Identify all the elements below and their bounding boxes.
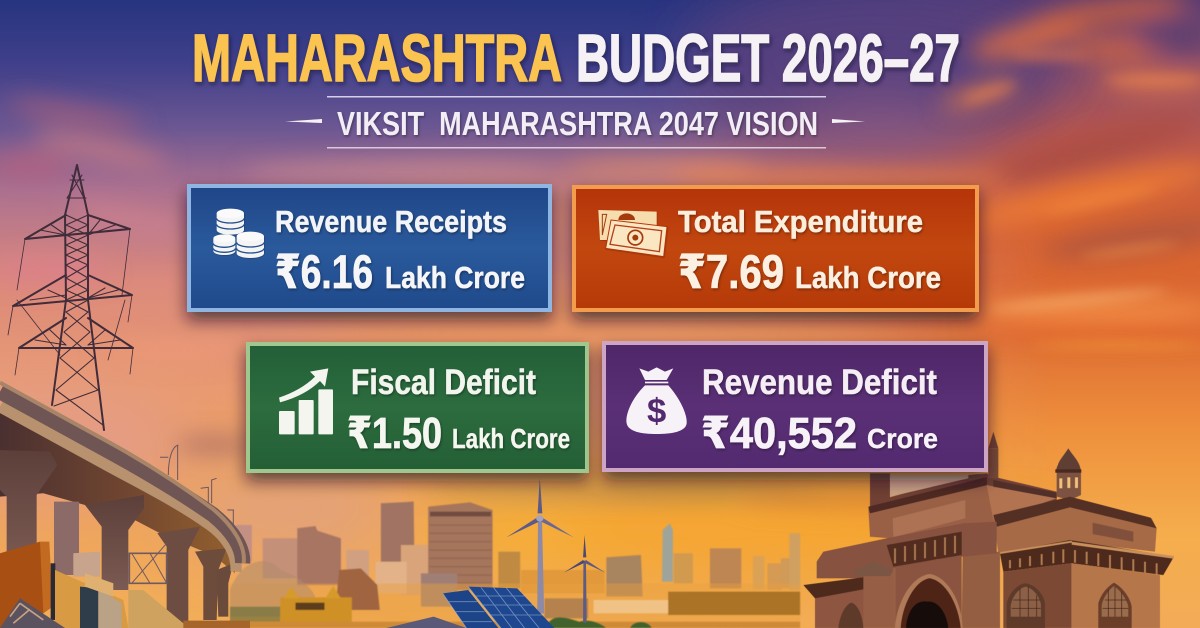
subtitle: Viksit Maharashtra 2047 Vision	[285, 96, 865, 148]
title: MAHARASHTRA	[192, 21, 562, 96]
value	[678, 245, 941, 298]
value: Lakh Crore	[385, 260, 525, 295]
value	[275, 245, 525, 298]
panel: revenue deficit	[602, 341, 988, 472]
icon: coin stacks	[213, 209, 264, 258]
value	[347, 409, 570, 458]
value: Lakh Crore	[795, 260, 941, 295]
arched windows	[838, 583, 1132, 628]
panel: total expenditure	[572, 185, 979, 312]
skyline: distant city with buildings	[230, 502, 800, 628]
value: ₹7.69	[678, 245, 784, 298]
icon: transmission tower	[8, 165, 133, 430]
icon: solar panels	[386, 587, 554, 628]
central arch	[895, 574, 963, 628]
label: Total Expenditure	[678, 204, 923, 239]
icon: Gateway of India monument	[803, 432, 1174, 628]
icon: banknotes	[598, 210, 667, 257]
flyover piers	[0, 450, 233, 623]
title: BUDGET 2026–27	[576, 21, 960, 96]
chhatri turret	[1055, 448, 1081, 500]
flyover bridge and foreground buildings	[0, 383, 250, 628]
icon: money bag: $	[647, 393, 666, 431]
value: Lakh Crore	[452, 423, 570, 454]
title	[192, 21, 960, 96]
value: Crore	[867, 423, 938, 454]
label: Revenue Receipts	[275, 204, 507, 239]
label: Revenue Deficit	[702, 363, 937, 402]
icon: wind turbines	[506, 478, 605, 623]
subtitle: Viksit Maharashtra 2047 Vision: VIKSIT MAHARASHTRA 2047 VISION	[337, 105, 818, 142]
panel: revenue receipts	[187, 184, 552, 312]
value: ₹6.16	[275, 245, 373, 298]
value: ₹40,552	[701, 409, 857, 458]
value	[701, 409, 938, 458]
icon: money bag	[626, 367, 687, 434]
label: Fiscal Deficit	[351, 363, 536, 402]
foreground buildings	[0, 542, 250, 628]
panel: fiscal deficit	[246, 342, 589, 473]
icon: rising bar chart	[279, 368, 333, 434]
value: ₹1.50	[347, 409, 442, 458]
